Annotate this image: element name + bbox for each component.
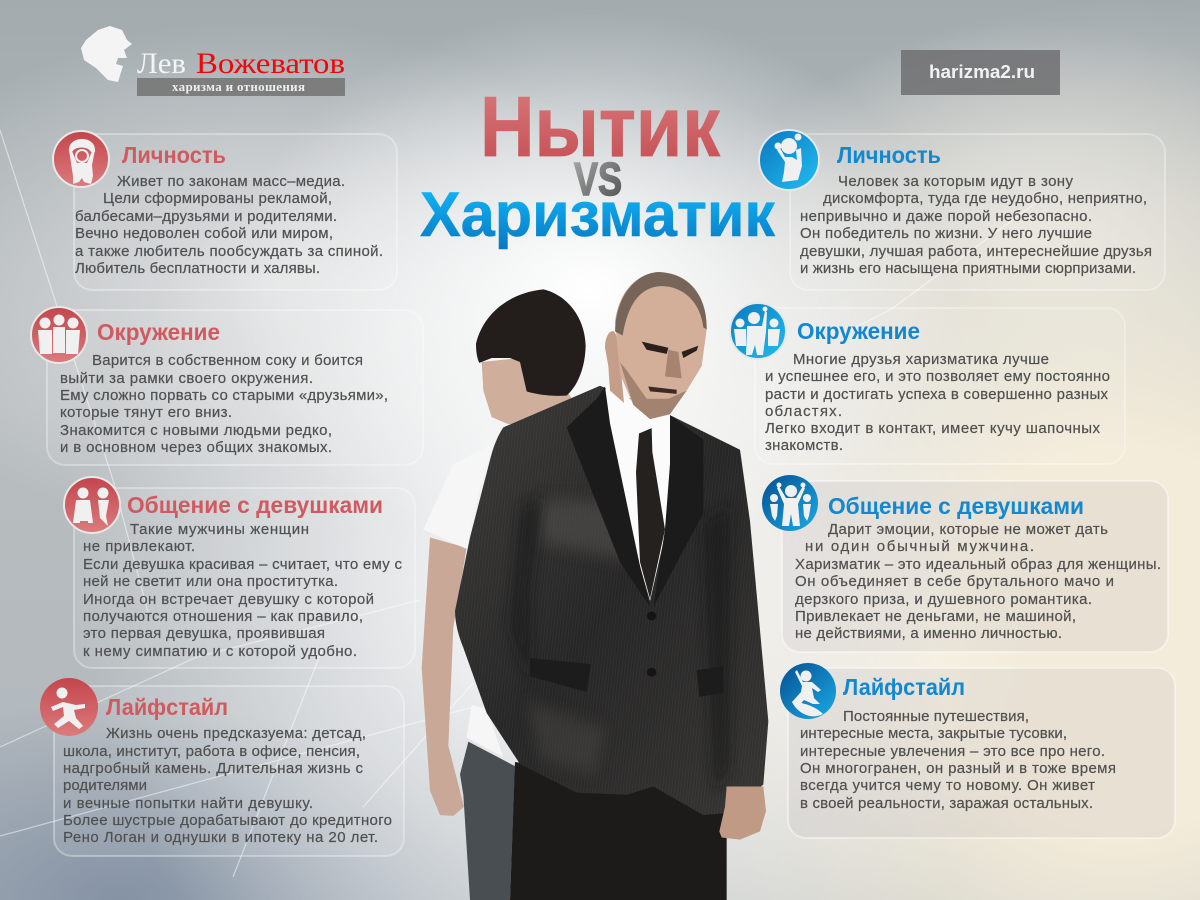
- text: интересные места, закрытые тусовки,: [800, 725, 1067, 742]
- text: интересные увлечения – это все про него.: [800, 743, 1105, 760]
- text: знакомств.: [765, 437, 843, 454]
- heading: Личность: [837, 142, 941, 168]
- text: Постоянные путешествия,: [843, 708, 1029, 725]
- heading: Окружение: [97, 319, 220, 345]
- text: родителями: [63, 777, 147, 794]
- website badge: harizma2.ru: [929, 62, 1035, 82]
- icon: lion: [81, 26, 132, 82]
- text: [765, 351, 1110, 454]
- text: Такие мужчины женщин: [130, 521, 309, 538]
- text: дерзкого приза, и душевного романтика.: [795, 591, 1092, 608]
- panel: left Окружение: [31, 307, 423, 465]
- panel: right Окружение: [730, 303, 1125, 464]
- text: девушки, лучшая работа, интереснейшие друзья: [800, 243, 1152, 260]
- icon: leader with group: [730, 303, 786, 359]
- text: Он многогранен, он разный и в тоже время: [800, 760, 1116, 777]
- text: дискомфорта, туда где неудобно, неприятно,: [823, 190, 1147, 207]
- heading: Лайфстайл: [106, 694, 228, 720]
- text: и в основном через общих знакомых.: [60, 439, 332, 456]
- text: выйти за рамки своего окружения.: [60, 370, 313, 387]
- panel: right Лайфстайл: [780, 663, 1175, 838]
- text: Иногда он встречает девушку с которой: [83, 591, 374, 608]
- boy: [422, 289, 586, 900]
- text: [63, 725, 392, 846]
- icon: strained figure: [53, 131, 109, 187]
- icon: leader with two girls: [762, 475, 818, 531]
- panel: left Общение с девушками: [64, 477, 415, 668]
- panel: left Личность: [53, 131, 397, 290]
- title: [420, 80, 775, 250]
- text: [75, 173, 383, 277]
- icon: couple: [64, 477, 120, 533]
- text: Человек за которым идут в зону: [838, 173, 1074, 190]
- text: Харизматик – это идеальный образ для женщины.: [795, 556, 1161, 573]
- text: [795, 521, 1161, 642]
- heading: Общение с девушками: [127, 492, 383, 518]
- logo tagline: [137, 78, 345, 96]
- text: не привлекают.: [83, 538, 195, 555]
- text: к нему симпатию и с которой удобно.: [83, 643, 357, 660]
- text: Ему сложно порвать со старыми «друзьями»,: [60, 387, 388, 404]
- text: [60, 352, 388, 456]
- title: Харизматик: Харизматик: [420, 180, 775, 250]
- website badge: [901, 50, 1060, 95]
- title: Нытик: Нытик: [480, 80, 720, 175]
- text: и успешнее его, и это позволяет ему постоянно: [765, 368, 1110, 385]
- text: Более шустрые дорабатывают до кредитного: [63, 812, 392, 829]
- text: а также любитель пообсуждать за спиной.: [75, 243, 383, 260]
- panel: left Лайфстайл: [40, 678, 404, 856]
- text: Привлекает не деньгами, не машиной,: [795, 608, 1076, 625]
- logo name: Вожеватов: [196, 47, 345, 80]
- logo: [81, 26, 345, 96]
- text: непривычно и даже порой небезопасно.: [800, 208, 1092, 225]
- heading: Лайфстайл: [843, 674, 965, 700]
- text: расти и достигать успеха в совершенно разных: [765, 386, 1108, 403]
- logo name: Лев: [137, 47, 186, 80]
- text: Рено Логан и однушки в ипотеку на 20 лет.: [63, 829, 378, 846]
- heading: Личность: [122, 142, 226, 168]
- text: это первая девушка, проявившая: [83, 625, 325, 642]
- text: Цели сформированы рекламой,: [103, 190, 332, 207]
- man: [455, 272, 768, 900]
- text: и вечные попытки найти девушку.: [63, 795, 313, 812]
- icon: surfer: [780, 663, 836, 719]
- text: Многие друзья харизматика лучше: [793, 351, 1049, 368]
- text: ни один обычный мужчина.: [805, 538, 1034, 555]
- panel: right Общение с девушками: [762, 475, 1168, 652]
- text: [800, 173, 1152, 277]
- text: балбесами–друзьями и родителями.: [75, 208, 337, 225]
- text: [83, 521, 402, 660]
- title: vs: VS: [574, 153, 622, 205]
- heading: Окружение: [797, 318, 920, 344]
- logo tagline: харизма и отношения: [172, 79, 305, 94]
- text: надгробный камень. Длительная жизнь с: [63, 760, 364, 777]
- text: которые тянут его вниз.: [60, 404, 232, 421]
- text: ней не светит или она проститутка.: [83, 573, 338, 590]
- photo: two men: [422, 272, 768, 900]
- heading: Общение с девушками: [828, 493, 1084, 519]
- text: получаются отношения – как правило,: [83, 608, 363, 625]
- text: [800, 708, 1116, 812]
- icon: group: [31, 307, 87, 363]
- text: Вечно недоволен собой или миром,: [75, 225, 333, 242]
- icon: walker: [40, 678, 98, 736]
- icon: figure with raised arms: [759, 130, 819, 190]
- text: Знакомится с новыми людьми редко,: [60, 422, 332, 439]
- text: всегда учится чему то новому. Он живет: [800, 777, 1095, 794]
- text: и жизнь его насыщена приятными сюрпризами.: [800, 260, 1136, 277]
- text: Если девушка красивая – считает, что ему с: [83, 556, 402, 573]
- text: Он объединяет в себе брутального мачо и: [795, 573, 1114, 590]
- text: Живет по законам масс–медиа.: [117, 173, 345, 190]
- text: Варится в собственном соку и боится: [92, 352, 363, 369]
- text: Легко входит в контакт, имеет кучу шапочных: [765, 420, 1100, 437]
- text: в своей реальности, заражая остальных.: [800, 795, 1093, 812]
- text: Дарит эмоции, которые не может дать: [828, 521, 1108, 538]
- text: Жизнь очень предсказуема: детсад,: [106, 725, 366, 742]
- text: не действиями, а именно личностью.: [795, 625, 1062, 642]
- text: областях.: [765, 403, 842, 420]
- text: Он победитель по жизни. У него лучшие: [800, 225, 1092, 242]
- text: школа, институт, работа в офисе, пенсия,: [63, 743, 360, 760]
- text: Любитель бесплатности и халявы.: [75, 260, 320, 277]
- panel: right Личность: [759, 130, 1165, 290]
